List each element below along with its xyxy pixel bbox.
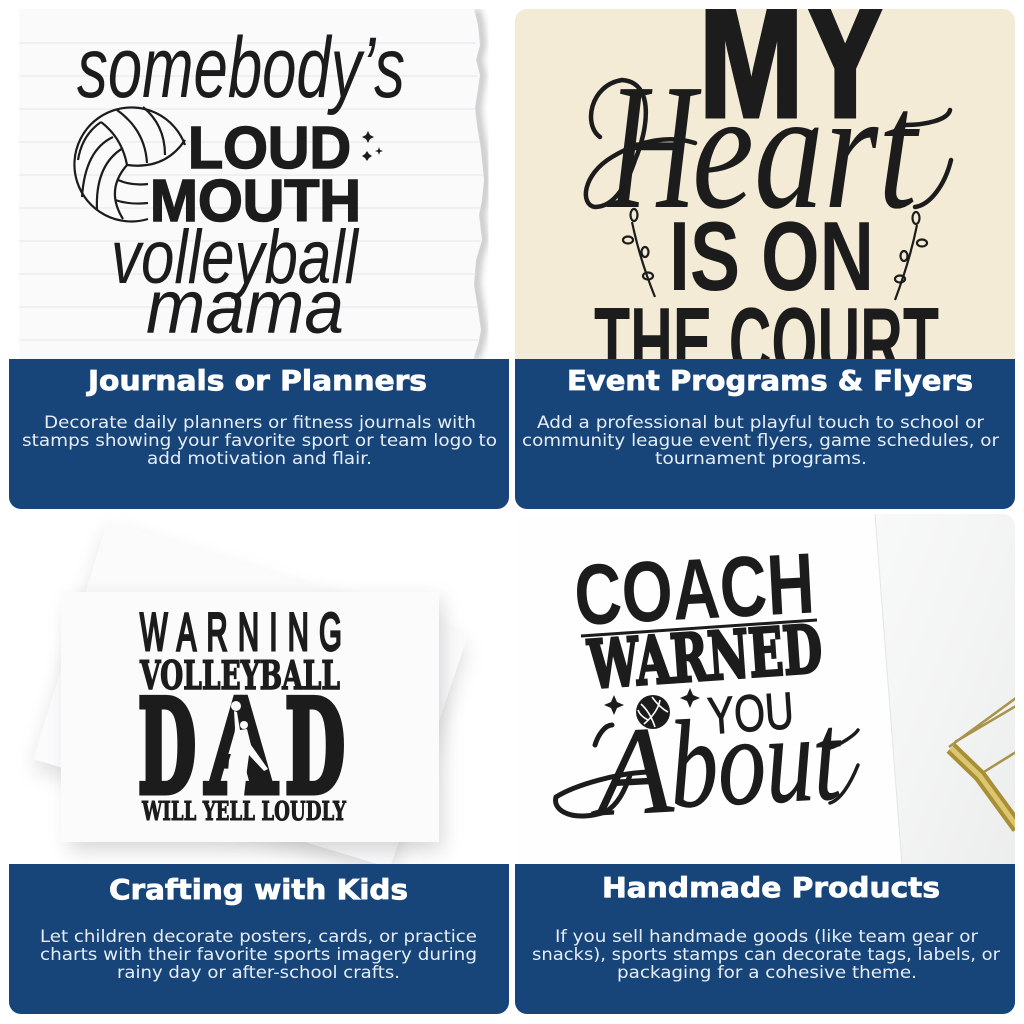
photo: stacked white cards with stamp	[32, 535, 470, 864]
caption bar: event programs and flyers	[515, 359, 1015, 509]
stamp: About: bout	[666, 688, 846, 835]
stamp: Heart	[584, 78, 954, 210]
heading: journals or planners: Journals or Planners	[86, 364, 427, 397]
description: crafting with kids	[40, 927, 477, 983]
photo: cream paper with stamp	[515, 9, 1015, 359]
icon: volleyball player silhouette	[228, 701, 268, 796]
icon: gold binder clip	[949, 698, 1018, 828]
stamp: DAD with player silhouette	[139, 694, 344, 796]
stamp: DAD with player silhouette: A	[205, 673, 277, 823]
front card	[61, 592, 442, 850]
caption bar: handmade products	[515, 864, 1015, 1014]
heading: event programs and flyers: Event Programs & Flyers	[567, 364, 973, 397]
description: handmade products: If you sell handmade goods (like team gear or	[555, 927, 978, 947]
description: crafting with kids: charts with their favorite sports imagery during	[40, 945, 477, 965]
divider line	[581, 620, 817, 636]
stamp: MOUTH: MOUTH	[150, 168, 361, 234]
stamp: volleyball: volleyball	[111, 215, 360, 300]
caption bar: journals or planners	[9, 359, 509, 509]
icon: volleyball	[636, 695, 670, 729]
description: handmade products: packaging for a cohesive theme.	[617, 963, 917, 983]
description: handmade products	[532, 927, 1000, 983]
stamp: VOLLEYBALL: VOLLEYBALL	[139, 653, 340, 699]
stamp: mama: mama	[146, 265, 344, 350]
description: journals or planners: add motivation and flair.	[147, 449, 372, 469]
stamp: WILL YELL LOUDLY: WILL YELL LOUDLY	[141, 797, 346, 827]
stamp: WARNED: WARNED	[585, 610, 825, 704]
description: journals or planners: stamps showing your favorite sport or team logo to	[22, 431, 497, 451]
heading: crafting with kids: Crafting with Kids	[109, 873, 408, 906]
panel: handmade products	[515, 514, 1018, 1014]
icon: left leaf sprig	[623, 209, 655, 297]
stamp: DAD with player silhouette: D	[285, 673, 345, 823]
description: event programs and flyers: tournament programs.	[655, 449, 867, 469]
icon: volleyball outline	[74, 107, 185, 221]
stamp: DAD with player silhouette: D	[138, 673, 196, 823]
description: event programs and flyers	[522, 413, 999, 469]
description: event programs and flyers: community league event flyers, game schedules, or	[522, 431, 999, 451]
panel: crafting with kids	[9, 514, 509, 1014]
photo: torn notebook paper with stamp	[9, 9, 509, 360]
caption bar: crafting with kids	[9, 864, 509, 1014]
stamp: Heart: H	[607, 47, 702, 246]
description: crafting with kids: Let children decorate posters, cards, or practice	[40, 927, 477, 947]
stamp: About: A	[585, 701, 676, 843]
description: event programs and flyers: Add a professional but playful touch to school or	[537, 413, 984, 433]
icon: sparkles	[362, 131, 383, 161]
description: journals or planners	[22, 413, 497, 469]
description: crafting with kids: rainy day or after-school crafts.	[117, 963, 400, 983]
stamp: WARNING: WARNING	[140, 603, 342, 662]
stamp: Heart: eart	[692, 56, 920, 244]
description: journals or planners: Decorate daily planners or fitness journals with	[44, 413, 476, 433]
icon: right leaf sprig	[895, 212, 927, 300]
stamp: somebody's: somebody’s	[77, 20, 405, 116]
stamp: About	[553, 718, 860, 818]
panel: journals or planners	[9, 9, 509, 509]
back card	[33, 520, 468, 878]
icon: sparkles	[604, 688, 700, 715]
stamp: IS ON: IS ON	[669, 201, 874, 311]
stamp: COACH: COACH	[572, 536, 817, 644]
stamp: YOU: YOU	[706, 682, 796, 746]
panel: event programs and flyers	[515, 0, 1015, 509]
description: handmade products: snacks), sports stamps can decorate tags, labels, or	[532, 945, 1000, 965]
heading: handmade products: Handmade Products	[602, 871, 940, 904]
stamp: LOUD: LOUD	[188, 115, 351, 181]
photo: white card, desk and gold clip	[515, 514, 1018, 865]
